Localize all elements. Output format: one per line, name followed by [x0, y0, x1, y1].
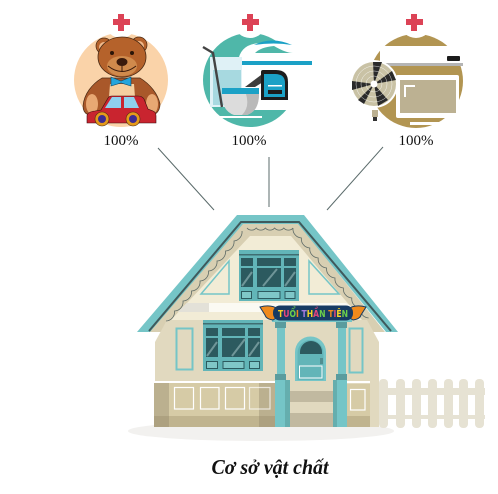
base right — [347, 381, 370, 427]
house — [137, 215, 398, 427]
label: 100% equipment: 100% — [398, 133, 434, 149]
upper window — [239, 250, 299, 301]
label: 100% kitchen: 100% — [232, 133, 266, 149]
icon: air conditioner, fan and screen — [350, 6, 463, 128]
gable triangle right — [309, 261, 339, 294]
label: 100% toys: 100% — [104, 133, 138, 149]
wall — [155, 320, 379, 427]
logo banner: TUỔI THẦN TIÊN — [278, 305, 348, 320]
gable cream — [171, 236, 362, 320]
porch — [272, 318, 352, 427]
wall panels — [176, 328, 192, 370]
icon: teddy bear and car — [74, 6, 168, 127]
ground shadow — [128, 421, 394, 441]
roof dark line — [149, 222, 391, 331]
base left — [154, 381, 275, 427]
door — [295, 336, 326, 381]
roof — [137, 215, 398, 332]
title: Cơ sở vật chất — [212, 455, 330, 479]
connector lines — [158, 147, 383, 210]
icon: kitchen bowl and glass — [203, 6, 312, 127]
fence — [379, 379, 485, 428]
gable shadow band — [149, 222, 385, 332]
steps — [290, 391, 333, 427]
lower window — [203, 320, 263, 371]
gable triangle left — [201, 261, 229, 294]
scallop trim — [166, 228, 369, 321]
white band — [178, 303, 360, 312]
logo banner — [260, 305, 366, 320]
